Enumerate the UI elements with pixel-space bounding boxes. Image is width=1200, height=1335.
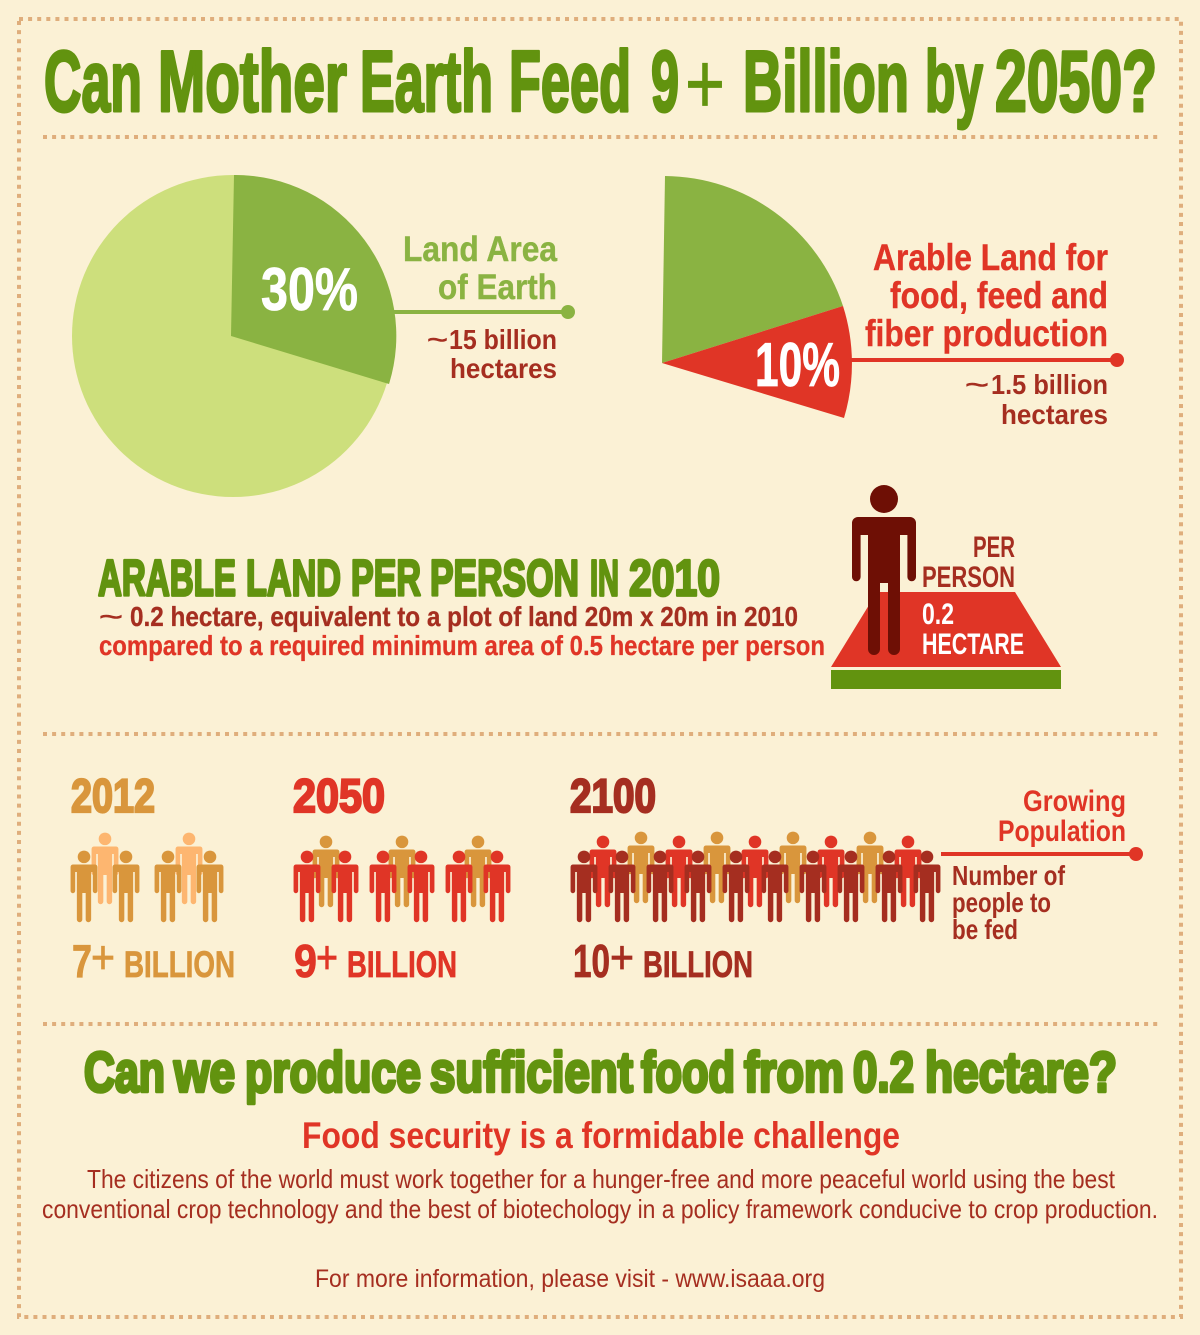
- panel: arable land: [662, 176, 1124, 430]
- year: 2100: [570, 769, 656, 822]
- connector line: [851, 353, 1124, 367]
- panel: population 2012: [71, 769, 235, 987]
- title: by: [925, 34, 983, 130]
- pie chart: 30% land area: 30%: [261, 256, 358, 323]
- icon: people 2050: [294, 836, 510, 922]
- icon: people 2100: [571, 832, 940, 922]
- heading: 0.2: [853, 1040, 914, 1104]
- figure: 9+ billion: +: [316, 931, 338, 983]
- figure: 9+ billion: [294, 931, 457, 987]
- label: 15 billion hectares: hectares: [450, 353, 557, 384]
- label: growing population: [998, 785, 1126, 848]
- body text: [42, 1164, 1158, 1224]
- title: Earth: [360, 34, 493, 130]
- icon: person on plot of land: HECTARE: [922, 628, 1024, 661]
- pie chart: 30% land area: [72, 175, 396, 497]
- label: number of people to be fed: Number of: [952, 860, 1066, 891]
- panel: arable land per person: [98, 485, 1061, 689]
- heading: we: [173, 1040, 235, 1104]
- heading: LAND: [246, 550, 341, 606]
- label: arable land for food, feed and fiber production: Arable Land for: [873, 237, 1108, 278]
- figure: 7+ billion: +: [91, 931, 115, 983]
- label: growing population: Population: [998, 815, 1126, 848]
- label: 15 billion hectares: 15 billion: [449, 324, 557, 355]
- icon: person on plot of land: 0.2: [922, 598, 954, 631]
- heading: hectare?: [925, 1040, 1117, 1104]
- heading: IN: [590, 550, 619, 606]
- pie wedge: 10% arable land: [662, 176, 852, 418]
- heading: produce: [245, 1040, 421, 1104]
- text block: compared to a required minimum area of 0.5 hectare per person: [99, 630, 825, 661]
- heading: food: [641, 1040, 735, 1104]
- text block: ~: [99, 601, 123, 632]
- figure: 10+ billion: +: [610, 931, 634, 983]
- heading: ARABLE: [98, 550, 236, 606]
- label: 1.5 billion hectares: 1.5 billion: [991, 369, 1108, 400]
- panel: land area of earth: [72, 175, 575, 497]
- figure: 10+ billion: BILLION: [643, 944, 753, 985]
- label: 1.5 billion hectares: [965, 369, 1108, 430]
- icon: people 2012: [71, 833, 223, 922]
- year: 2012: [71, 769, 155, 822]
- subheading: Food security is a formidable challenge: [302, 1115, 900, 1156]
- figure: 7+ billion: [72, 931, 235, 987]
- label: land area of earth: [403, 230, 557, 307]
- figure: 9+ billion: BILLION: [347, 944, 457, 985]
- figure: 9+ billion: 9: [294, 935, 317, 987]
- pie wedge: 10% arable land: 10%: [755, 331, 840, 400]
- label: number of people to be fed: [952, 860, 1066, 945]
- year: 2050: [293, 769, 385, 822]
- label: 15 billion hectares: [427, 324, 557, 384]
- heading: [84, 1040, 1117, 1104]
- label: arable land for food, feed and fiber production: [865, 237, 1108, 354]
- title: [44, 34, 1157, 132]
- label: growing population: Growing: [1023, 785, 1126, 818]
- label: 1.5 billion hectares: hectares: [1001, 399, 1108, 430]
- icon: person on plot of land: PERSON: [922, 561, 1015, 594]
- title: Feed: [509, 34, 631, 130]
- panel: population 2100: [570, 769, 940, 987]
- figure: 10+ billion: [573, 931, 753, 987]
- heading: [98, 550, 720, 606]
- label: number of people to be fed: be fed: [952, 914, 1018, 945]
- panel: conclusion: [42, 1040, 1158, 1293]
- heading: sufficient: [430, 1040, 633, 1104]
- figure: 7+ billion: 7: [72, 935, 92, 987]
- title: +: [685, 36, 725, 132]
- heading: from: [744, 1040, 844, 1104]
- label: land area of earth: Land Area: [403, 230, 557, 269]
- label: arable land for food, feed and fiber production: food, feed and: [890, 275, 1108, 316]
- icon: person on plot of land: [831, 485, 1061, 689]
- label: 15 billion hectares: ~: [427, 324, 448, 355]
- label: arable land for food, feed and fiber production: fiber production: [865, 313, 1108, 354]
- heading: PERSON: [430, 550, 579, 606]
- heading: PER: [351, 550, 421, 606]
- label: 1.5 billion hectares: ~: [965, 369, 989, 400]
- title: Billion: [743, 34, 909, 130]
- label: number of people to be fed: people to: [952, 887, 1051, 918]
- figure: 10+ billion: 10: [573, 935, 610, 987]
- label: land area of earth: of Earth: [438, 268, 557, 307]
- footer link: For more information, please visit - www.isaaa.org: [315, 1265, 825, 1293]
- heading: Can: [84, 1040, 165, 1104]
- connector line: [941, 847, 1143, 861]
- figure: 7+ billion: BILLION: [124, 944, 235, 985]
- text block: 0.2 hectare, equivalent to a plot of land 20m x 20m in 2010: [130, 601, 798, 632]
- icon: person on plot of land: PER: [973, 531, 1015, 564]
- heading: 2010: [629, 550, 720, 606]
- panel: population 2050: [293, 769, 510, 987]
- connector line: [393, 305, 575, 319]
- title: 9: [651, 34, 679, 130]
- title: Mother: [158, 34, 347, 130]
- text block: [99, 601, 825, 661]
- title: Can: [44, 34, 142, 130]
